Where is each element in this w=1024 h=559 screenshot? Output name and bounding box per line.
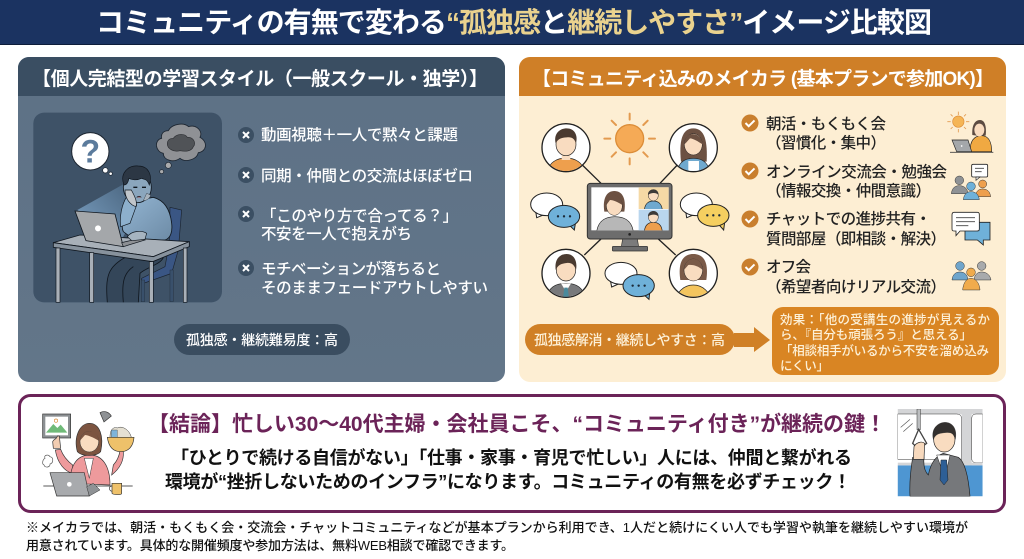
arrow: pill to effect <box>734 327 770 352</box>
panel: individual learning style <box>18 57 505 382</box>
conclusion body: 「ひとりで続ける自信がない」「仕事・家事・育児で忙しい」人には、仲間と繋がれる <box>171 447 852 468</box>
bullet: anxiety alone: 不安を一人で抱えがち <box>261 224 412 243</box>
bullet: anxiety alone <box>238 206 458 243</box>
checklist item: morning study <box>742 114 886 152</box>
conclusion body <box>165 447 852 492</box>
effect callout: ら、『自分も頑張ろう』と思える」 <box>780 327 972 342</box>
footnote: ※メイカラでは、朝活・もくもく会・交流会・チャットコミュニティなどが基本プランから利用でき、1人だと続けにくい人でも学習や執筆を継続しやすい環境が <box>26 520 968 535</box>
illustration: commuter on train <box>898 409 983 496</box>
effect callout <box>772 307 999 375</box>
panel heading: individual: 【個人完結型の学習スタイル（一般スクール・独学）】 <box>32 67 488 90</box>
panel heading: community: 【コミュニティ込みのメイカラ (基本プランで参加OK)】 <box>532 68 994 90</box>
status pill: isolation resolved <box>525 324 735 355</box>
bullet: anxiety alone: 「このやり方で合ってる？」 <box>261 207 458 225</box>
bullet: motivation fade out: モチベーションが落ちると <box>261 259 441 278</box>
status pill: isolation resolved: 孤独感解消・継続しやすさ：高 <box>534 332 725 348</box>
effect callout: にくい」 <box>780 359 829 373</box>
conclusion heading: 【結論】忙しい30〜40代主婦・会社員こそ、“コミュニティ付き”が継続の鍵！ <box>148 412 886 436</box>
bullet: motivation fade out: そのままフェードアウトしやすい <box>261 279 488 297</box>
panel: community meikara <box>519 57 1006 382</box>
illustration: lonely learner at laptop <box>33 113 222 302</box>
title banner <box>0 0 1024 45</box>
panel: conclusion <box>20 396 1004 512</box>
checklist item: offline meetup <box>742 258 946 296</box>
footnote: 用意されています。具体的な開催頻度や参加方法は、無料WEB相談で確認できます。 <box>26 538 514 553</box>
checklist item: morning study: 朝活・もくもく会 <box>766 115 886 133</box>
checklist item: online meetups <box>742 162 947 200</box>
illustration: lonely learner at laptop: ? <box>81 134 100 170</box>
checklist item: chat room: チャットでの進捗共有・ <box>766 210 931 228</box>
checklist item: chat room: 質問部屋（即相談・解決） <box>766 230 946 248</box>
effect callout: 効果：「他の受講生の進捗が見えるか <box>780 312 990 327</box>
illustration: busy woman multitasking <box>43 412 134 496</box>
bullet: motivation fade out <box>238 259 488 297</box>
checklist item: chat room <box>742 210 946 248</box>
checklist item: online meetups: オンライン交流会・勉強会 <box>766 162 947 181</box>
checklist item: offline meetup: オフ会 <box>766 258 811 276</box>
checklist item: online meetups: （情報交換・仲間意識） <box>766 182 931 200</box>
conclusion body: 環境が“挫折しないためのインフラ”になります。コミュニティの有無を必ずチェック！ <box>165 471 851 492</box>
checklist item: morning study: （習慣化・集中） <box>766 134 886 152</box>
bullet: no peer interaction: 同期・仲間との交流はほぼゼロ <box>261 167 473 185</box>
illustration: online community network <box>531 114 729 318</box>
bullet: video study alone: 動画視聴＋一人で黙々と課題 <box>261 126 458 144</box>
title text: コミュニティの有無で変わる“孤独感と継続しやすさ”イメージ比較図 <box>96 7 932 38</box>
status pill: isolation high <box>174 324 350 355</box>
footnote <box>26 520 968 553</box>
effect callout: 「相談相手がいるから不安を溜め込み <box>780 343 989 358</box>
checklist item: offline meetup: （希望者向けリアル交流） <box>766 278 946 296</box>
icons: activity pictograms <box>947 112 993 290</box>
status pill: isolation high: 孤独感・継続難易度：高 <box>186 332 338 348</box>
